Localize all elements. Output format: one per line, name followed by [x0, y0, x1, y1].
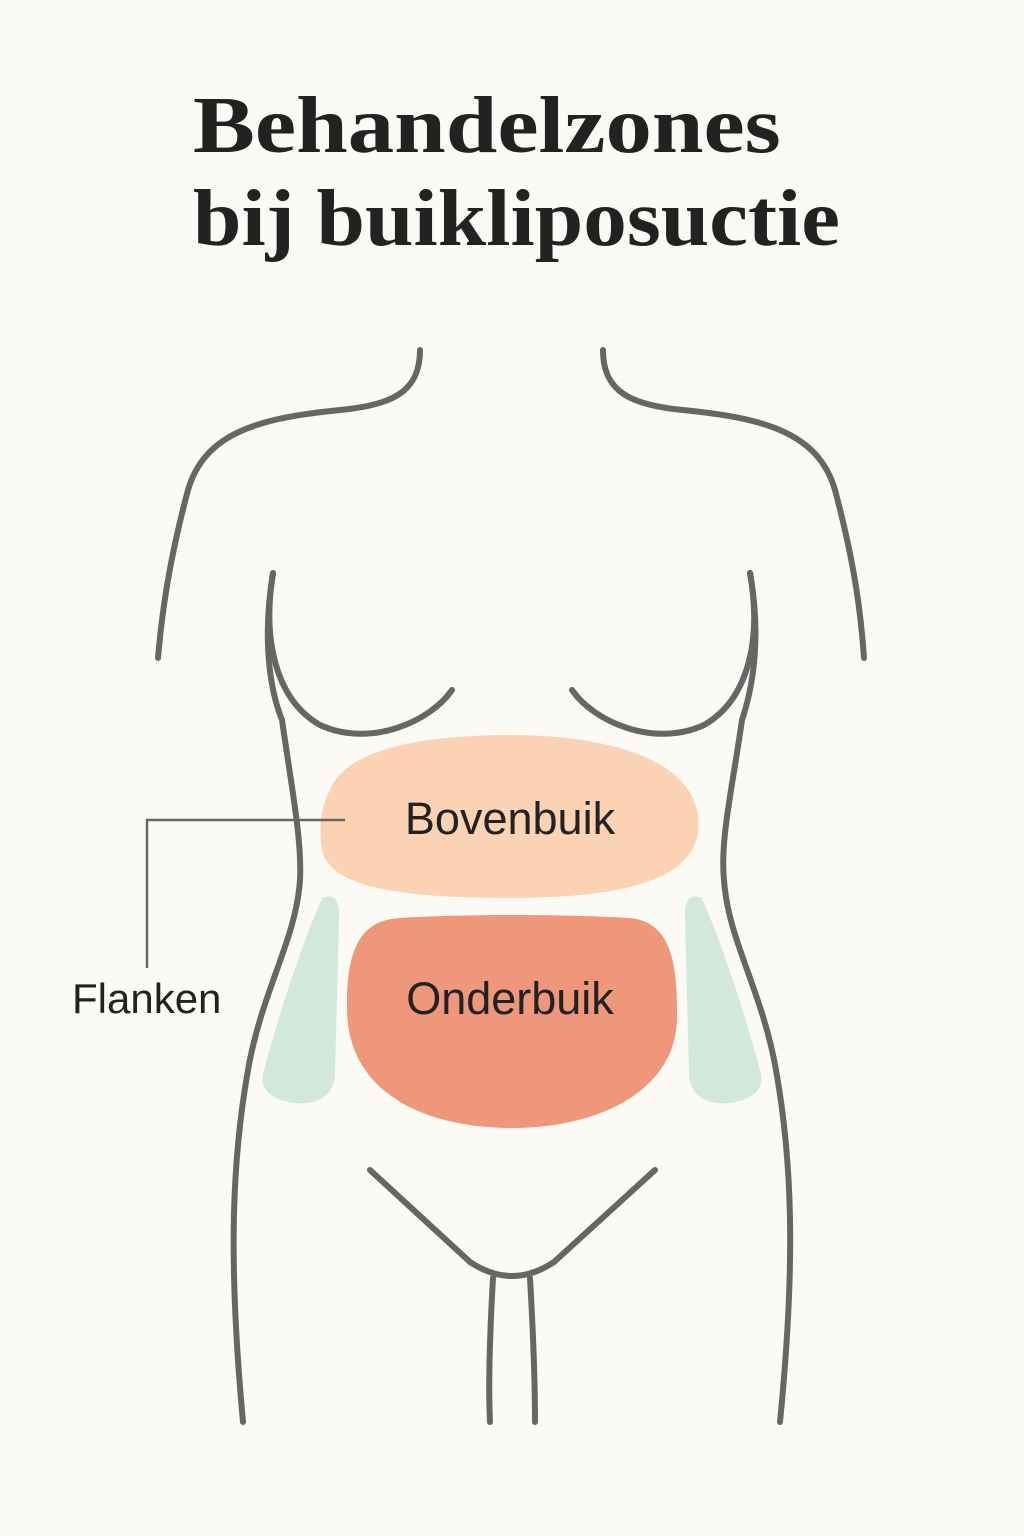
zone: bovenbuik: Bovenbuik: [405, 793, 616, 844]
title: [193, 82, 840, 263]
title: bij buikliposuctie: [193, 175, 840, 263]
zone: onderbuik: Onderbuik: [406, 973, 614, 1024]
zone: onderbuik: [347, 915, 677, 1128]
title: Behandelzones: [193, 82, 781, 170]
callout: flanken: [72, 820, 345, 1022]
callout: flanken: Flanken: [72, 975, 221, 1022]
zone: flanken rechts: [685, 896, 762, 1103]
body outline: [158, 350, 864, 1422]
zone: flanken links: [262, 896, 339, 1103]
zone: bovenbuik: [320, 735, 699, 898]
